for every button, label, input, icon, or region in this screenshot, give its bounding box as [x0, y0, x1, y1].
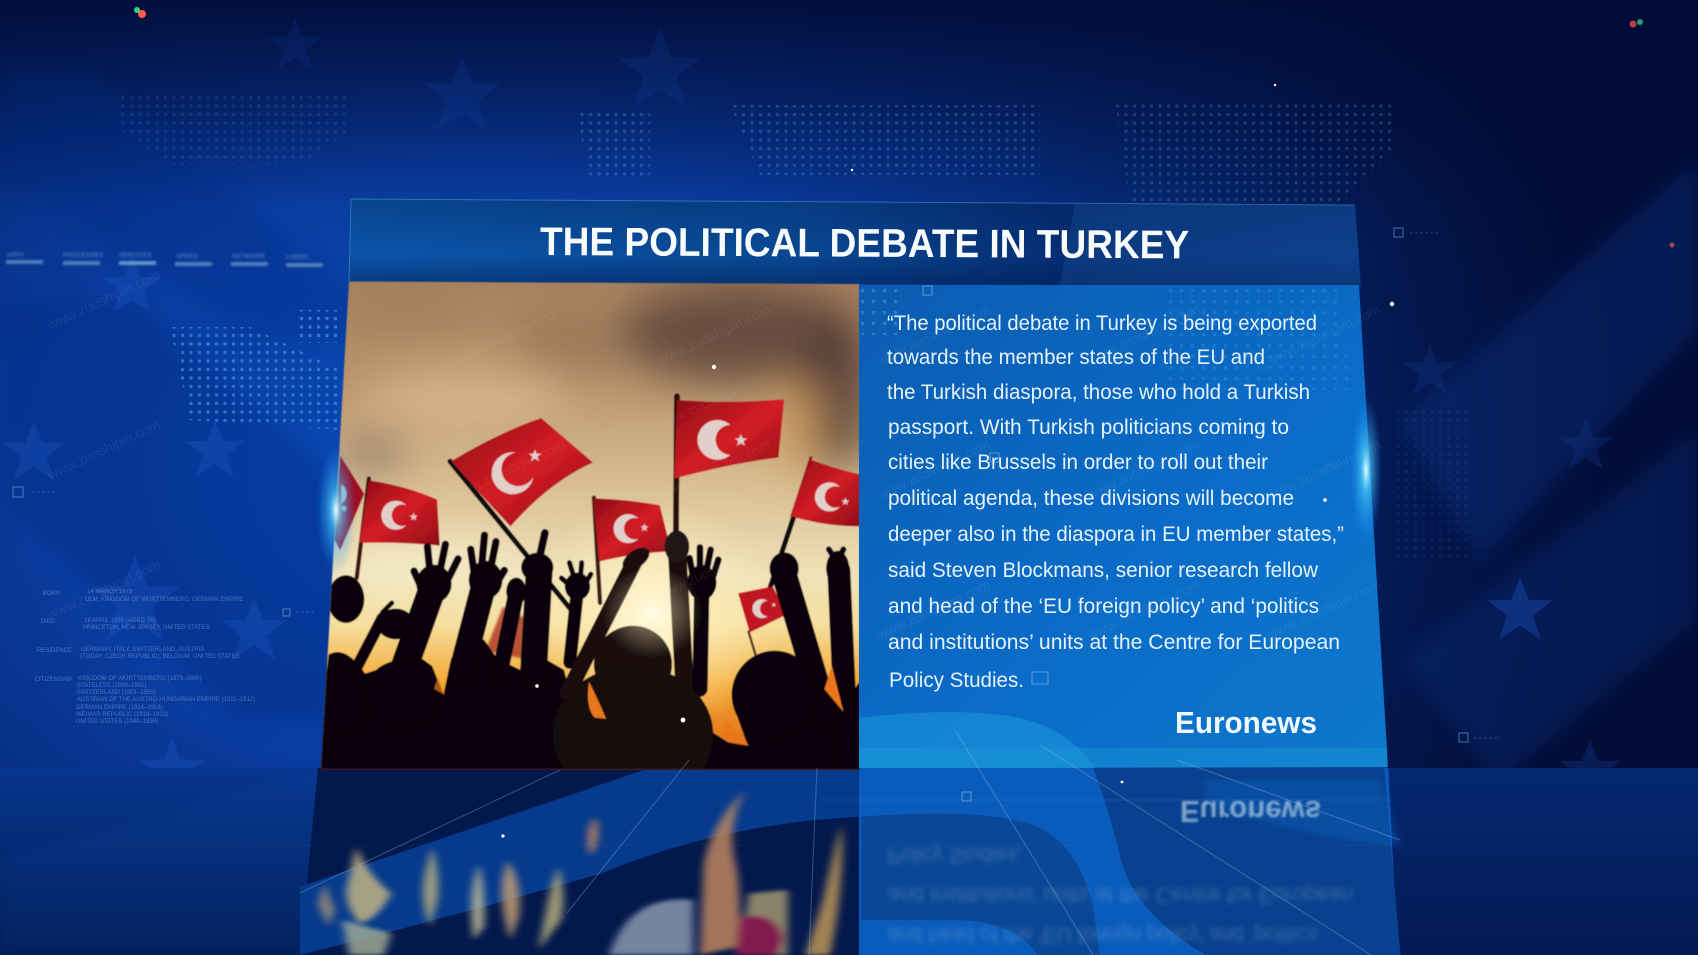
left status labels: PROCESSES [63, 252, 104, 259]
left biography data block: KINGDOM OF WÜRTTEMBERG (1879–1896) [78, 675, 202, 682]
source watermark: www.zuoshipin.com [44, 416, 163, 483]
small hud markers [13, 228, 1500, 858]
background stars [3, 18, 1620, 800]
left biography data block: (TODAY: CZECH REPUBLIC), BELGIUM, UNITED STATES [80, 654, 240, 660]
source label: Euronews [1175, 705, 1317, 740]
fingers [414, 544, 458, 586]
source watermark: www.zuoshipin.com [874, 301, 993, 368]
source watermark: www.zuoshipin.com [874, 576, 993, 643]
quote text: towards the member states of the EU and [887, 345, 1265, 369]
text panel [859, 285, 1388, 768]
left biography data block [35, 589, 255, 725]
left status labels: SPEED [176, 253, 198, 260]
source watermark: www.zuoshipin.com [874, 436, 993, 503]
left biography data block: GERMANY, ITALY, SWITZERLAND, AUSTRIA [81, 647, 204, 653]
floor perspective lines [300, 730, 1400, 955]
source watermark: www.zuoshipin.com [1264, 436, 1383, 503]
raised arms [357, 618, 382, 666]
source watermark: www.zuoshipin.com [44, 266, 163, 333]
source watermark: www.zuoshipin.com [1264, 301, 1383, 368]
left biography data block: WEIMAR REPUBLIC (1919–1933) [76, 712, 168, 718]
reflection: text panel [859, 768, 1400, 955]
reflection: photo [300, 768, 861, 955]
left status labels: USERS [286, 254, 309, 261]
left status labels: NETWORK [232, 253, 266, 260]
left biography data block: 18 APRIL 1955 (AGED 76) [84, 618, 155, 624]
left biography data block: 14 MARCH 1879 [87, 589, 133, 595]
photo sky [315, 280, 870, 773]
source watermark: www.zuoshipin.com [654, 301, 773, 368]
source watermark: www.zuoshipin.com [654, 366, 773, 433]
left biography data block: ULM, KINGDOM OF WÜRTTEMBERG, GERMAN EMPIRE [85, 596, 243, 603]
source watermark: www.zuoshipin.com [449, 301, 568, 368]
left status labels: SERVICES [119, 252, 152, 259]
crescents and stars [341, 420, 849, 618]
orange gaps [434, 666, 843, 746]
header bar [349, 199, 1361, 286]
reflected source label: Euronews [1180, 794, 1321, 829]
quote text [887, 311, 1344, 692]
source watermark: www.zuoshipin.com [449, 436, 568, 503]
reflected quote lines [888, 843, 1353, 948]
light specks [134, 7, 1674, 838]
quote text: and head of the ‘EU foreign policy’ and ‘politics [888, 594, 1319, 618]
palms [328, 575, 364, 623]
flag poles [357, 396, 811, 655]
left status labels [6, 252, 323, 267]
edge light glows [316, 395, 1382, 575]
quote text: passport. With Turkish politicians coming to [888, 415, 1289, 439]
source watermark: www.zuoshipin.com [1084, 436, 1203, 503]
left biography data block: UNITED STATES (1940–1955) [76, 719, 158, 725]
source watermark: www.zuoshipin.com [654, 536, 773, 603]
floor [0, 768, 1698, 955]
photo: flags at sunset [315, 280, 870, 804]
quote text: deeper also in the diaspora in EU member states,” [888, 522, 1344, 546]
source watermark: www.zuoshipin.com [449, 366, 568, 433]
source watermark: www.zuoshipin.com [654, 436, 773, 503]
source watermark: www.zuoshipin.com [1084, 301, 1203, 368]
left biography data block: SWITZERLAND (1901–1955) [77, 690, 156, 696]
left biography data block: AUSTRIAN OF THE AUSTRO-HUNGARIAN EMPIRE (1911–1912) [77, 697, 255, 703]
heads [593, 625, 673, 676]
reflected quote lines: and head of the ‘EU foreign policy’ and ‘politics [888, 923, 1318, 948]
quote text: and institutions’ units at the Centre for European [888, 630, 1340, 654]
source watermark: www.zuoshipin.com [1084, 576, 1203, 643]
title: THE POLITICAL DEBATE IN TURKEY [540, 220, 1189, 267]
left status labels: APPS [7, 252, 25, 259]
reflected quote lines: Policy Studies. [888, 843, 1023, 868]
sun glare [602, 567, 702, 658]
quote text: cities like Brussels in order to roll out their [888, 450, 1268, 474]
left biography data block: GERMAN EMPIRE (1914–1918) [76, 705, 163, 711]
source watermark: www.zuoshipin.com [1264, 576, 1383, 643]
world map dot pattern [120, 95, 1470, 560]
left biography data block: BORN [43, 591, 60, 597]
left biography data block: CITIZENSHIP [35, 677, 72, 683]
quote text: political agenda, these divisions will become [888, 486, 1294, 510]
left biography data block: STATELESS (1896–1901) [77, 683, 146, 689]
quote text: said Steven Blockmans, senior research fellow [888, 558, 1318, 582]
left biography data block: DIED [41, 619, 56, 625]
source watermark [44, 266, 1383, 643]
quote text: Policy Studies. [889, 668, 1024, 692]
quote text: “The political debate in Turkey is being exported [887, 311, 1317, 335]
quote text: the Turkish diaspora, those who hold a Turkish [887, 380, 1310, 404]
source watermark: www.zuoshipin.com [44, 556, 163, 623]
reflected quote lines: and institutions’ units at the Centre for European [888, 883, 1353, 908]
hud markers inside panel [923, 286, 1048, 801]
flags [334, 399, 861, 660]
crowd silhouette [320, 528, 860, 770]
left biography data block: PRINCETON, NEW JERSEY, UNITED STATES [83, 625, 210, 631]
left biography data block: RESIDENCE [37, 648, 72, 654]
